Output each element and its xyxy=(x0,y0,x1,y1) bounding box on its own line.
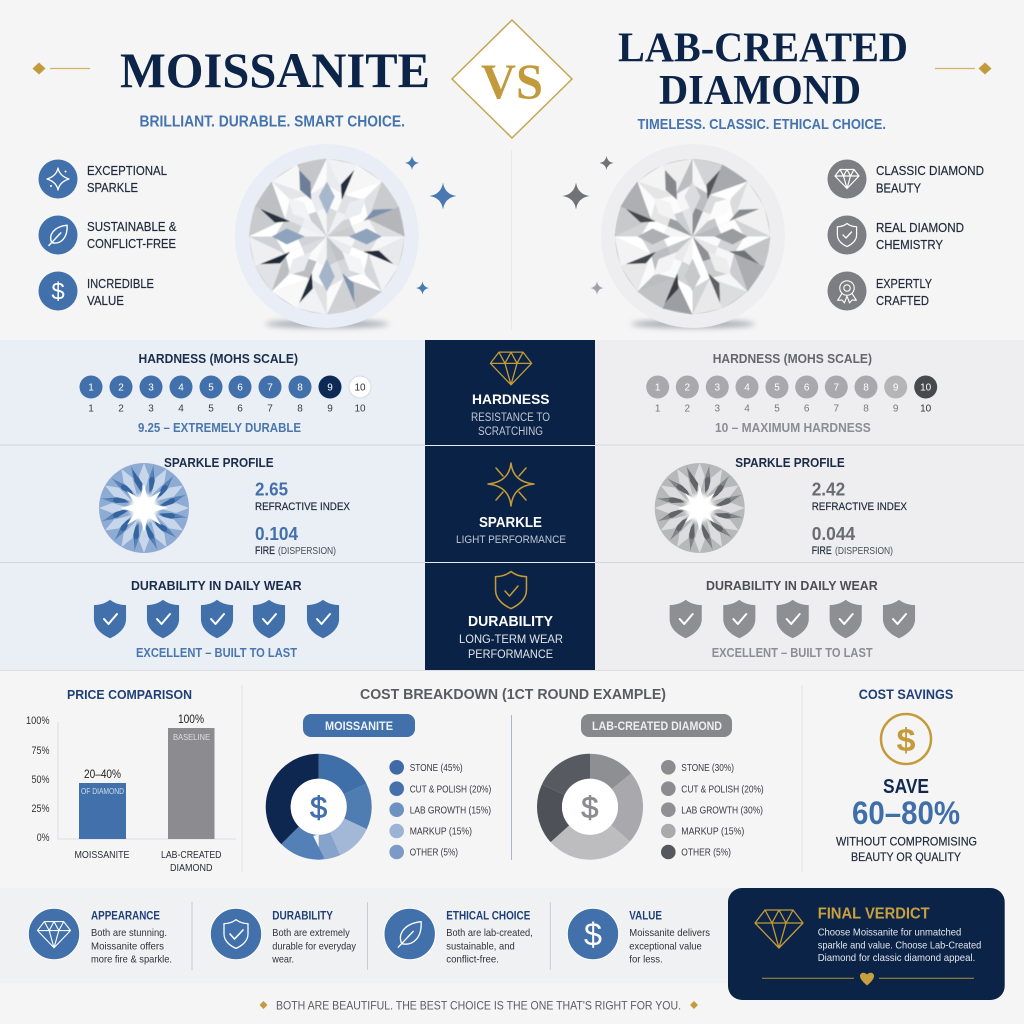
axis labels: 50% xyxy=(32,774,50,786)
chart: Mohs scale dots gray: 1 xyxy=(655,404,661,414)
header: Lab-Created Diamond title block xyxy=(618,26,992,133)
pill: lab-created diamond xyxy=(581,714,732,737)
chart: Mohs scale dots: 2 xyxy=(118,382,124,394)
chart: Mohs scale dots gray: 1 xyxy=(655,382,661,394)
chart: Mohs scale dots gray: 7 xyxy=(834,404,840,414)
chart: Mohs scale dots: 4 xyxy=(178,404,184,414)
heading: durability in daily wear gray: DURABILITY IN DAILY WEAR xyxy=(706,578,878,593)
bar labels: MOISSANITE xyxy=(74,849,130,861)
chart: Mohs scale dots: 6 xyxy=(237,404,243,414)
metric: refractive index: REFRACTIVE INDEX xyxy=(255,501,351,513)
axis labels xyxy=(26,715,50,844)
bar: lab-created diamond: BASELINE xyxy=(173,732,210,742)
chart: Mohs scale dots gray: 4 xyxy=(744,404,750,414)
chart: Mohs scale dots gray: 10 xyxy=(920,404,932,414)
text: expertly crafted: CRAFTED xyxy=(876,293,929,308)
item: durability: DURABILITY xyxy=(272,910,333,922)
item: ethical choice: conflict-free. xyxy=(446,953,499,965)
bar labels xyxy=(74,849,222,874)
metric: refractive index xyxy=(255,479,351,513)
bar: moissanite: OF DIAMOND xyxy=(81,786,124,796)
chart: Mohs scale dots: 6 xyxy=(237,382,243,394)
chart: Mohs scale dots: 8 xyxy=(297,382,303,394)
legend: lab-created diamond: MARKUP (15%) xyxy=(681,826,744,838)
legend: moissanite: MARKUP (15%) xyxy=(410,826,472,838)
stat: 60-80 percent: 60–80% xyxy=(852,795,960,831)
donut: lab-created slices xyxy=(550,766,630,847)
item: ethical choice: sustainable, and xyxy=(446,940,515,952)
metric: fire dispersion: FIRE xyxy=(255,545,275,557)
callout: excellent built to last gray: EXCELLENT – BUILT TO LAST xyxy=(712,646,873,660)
icons: blue sparkles xyxy=(405,156,456,294)
subtitle: Lab diamond tagline: TIMELESS. CLASSIC. ETHICAL CHOICE. xyxy=(638,116,886,133)
chart: Mohs scale dots: 1 xyxy=(88,382,94,394)
heading: hardness Mohs scale gray: HARDNESS (MOHS SCALE) xyxy=(713,351,872,366)
metric: fire dispersion gray: (DISPERSION) xyxy=(835,546,893,557)
heading: durability in daily wear: DURABILITY IN DAILY WEAR xyxy=(131,578,302,593)
callout: excellent built to last: EXCELLENT – BUILT TO LAST xyxy=(136,646,297,660)
legend: lab-created diamond xyxy=(661,760,764,859)
chart: Mohs scale dots: 10 xyxy=(354,404,366,414)
label: sparkle xyxy=(456,515,566,546)
text: sustainable and conflict-free xyxy=(87,219,177,251)
chart: Lab-created cost donut xyxy=(550,714,764,859)
ornament: left gold diamond and line xyxy=(32,62,90,74)
label: sparkle: LIGHT PERFORMANCE xyxy=(456,534,566,546)
icon: shield xyxy=(828,216,866,254)
text: real diamond chemistry: REAL DIAMOND xyxy=(876,220,964,235)
text: save: SAVE xyxy=(883,775,929,798)
icons: five gray shields xyxy=(670,600,915,638)
legend: moissanite: CUT & POLISH (20%) xyxy=(410,783,491,795)
text: sustainable and conflict-free: SUSTAINABLE & xyxy=(87,219,177,234)
label: hardness: RESISTANCE TO xyxy=(471,412,550,424)
panel: summary strip xyxy=(0,888,735,983)
heading: final verdict: FINAL VERDICT xyxy=(818,905,930,922)
icon: gray sparkle profile disc xyxy=(654,463,745,553)
callout: 9.25 extremely durable: 9.25 – EXTREMELY DURABLE xyxy=(138,421,301,435)
panel: Lab-created metrics xyxy=(595,340,1024,670)
pill: moissanite xyxy=(303,714,415,737)
label: durability: DURABILITY xyxy=(468,613,553,630)
legend: moissanite xyxy=(389,760,491,859)
icon: dollar xyxy=(38,272,78,310)
axis labels: 0% xyxy=(37,832,50,844)
chart: Mohs scale dots: 10 xyxy=(354,382,366,394)
chart: Mohs scale dots: 1 xyxy=(88,404,94,414)
item: ethical choice: Both are lab-created, xyxy=(446,927,533,939)
chart: Mohs scale dots: 7 xyxy=(267,382,273,394)
chart: Mohs scale dots gray xyxy=(646,376,937,414)
metric: fire dispersion: (DISPERSION) xyxy=(278,546,336,557)
pill: lab-created diamond: LAB-CREATED DIAMOND xyxy=(592,721,722,733)
chart: Mohs scale dots gray: 4 xyxy=(744,382,750,394)
icon: gray donut dollar xyxy=(562,779,618,835)
badge: VS diamond: VS xyxy=(481,53,543,109)
chart: Mohs scale dots: 3 xyxy=(148,404,154,414)
chart: Mohs scale dots gray: 6 xyxy=(804,404,810,414)
text: real diamond chemistry xyxy=(876,220,964,252)
metric: fire dispersion: 0.104 xyxy=(255,523,299,544)
item: value: exceptional value xyxy=(629,940,702,952)
label: hardness: SCRATCHING xyxy=(478,426,543,438)
item: value xyxy=(567,908,710,965)
heading: cost savings: COST SAVINGS xyxy=(859,687,953,702)
icon: ribbon award xyxy=(828,272,866,310)
chart: price comparison bars xyxy=(26,687,236,874)
text: sustainable and conflict-free: CONFLICT-FREE xyxy=(87,236,176,251)
axis labels: 100% xyxy=(26,715,50,727)
chart: Mohs scale dots gray: 2 xyxy=(685,382,691,394)
item: appearance: more fire & sparkle. xyxy=(91,953,172,965)
label: sparkle: SPARKLE xyxy=(479,515,542,531)
metric: fire dispersion gray: FIRE xyxy=(812,545,832,557)
heading: cost breakdown: COST BREAKDOWN (1CT ROUND EXAMPLE) xyxy=(360,687,666,703)
metric: refractive index gray: REFRACTIVE INDEX xyxy=(812,501,908,513)
text: real diamond chemistry: CHEMISTRY xyxy=(876,237,943,252)
legend: moissanite: STONE (45%) xyxy=(410,762,463,774)
item: durability: wear. xyxy=(271,953,294,965)
legend: lab-created diamond: CUT & POLISH (20%) xyxy=(681,783,764,795)
bar labels: LAB-CREATED xyxy=(161,849,222,861)
ornament: gold heart divider xyxy=(762,973,974,986)
item: value: $ xyxy=(584,916,602,952)
panel: cost savings xyxy=(836,687,977,864)
metric: fire dispersion gray xyxy=(812,523,893,557)
bar: moissanite: 20–40% xyxy=(84,769,121,781)
icon: gold gem xyxy=(490,352,532,385)
heading: sparkle profile: SPARKLE PROFILE xyxy=(164,455,274,470)
item: ethical choice: ETHICAL CHOICE xyxy=(446,910,531,922)
metric: refractive index gray xyxy=(812,479,908,513)
axis labels: 75% xyxy=(32,745,50,757)
item: appearance xyxy=(28,908,172,965)
chart: Mohs scale dots: 5 xyxy=(208,382,214,394)
text: verdict body xyxy=(818,927,981,964)
panel: Moissanite metrics xyxy=(0,340,425,670)
icon: gold shield xyxy=(496,571,526,609)
icons: gray sparkles xyxy=(562,156,614,294)
chart: Mohs scale dots: 4 xyxy=(178,382,184,394)
label: durability: LONG-TERM WEAR xyxy=(459,632,563,646)
bar labels: DIAMOND xyxy=(170,862,213,874)
legend: moissanite: LAB GROWTH (15%) xyxy=(410,804,491,816)
icon: donut dollar: $ xyxy=(310,790,327,825)
chart: Mohs scale dots gray: 10 xyxy=(920,382,932,394)
chart: Mohs scale dots gray: 7 xyxy=(834,382,840,394)
legend: lab-created diamond: OTHER (5%) xyxy=(681,847,731,859)
pill: moissanite: MOISSANITE xyxy=(325,721,393,733)
text: classic diamond beauty: CLASSIC DIAMOND xyxy=(876,163,984,178)
footer: closing line: BOTH ARE BEAUTIFUL. THE BEST CHOICE IS THE ONE THAT'S RIGHT FOR YOU. xyxy=(276,998,681,1012)
donut: moissanite slices xyxy=(278,766,359,847)
icon: dollar: $ xyxy=(51,278,65,306)
item: value: for less. xyxy=(629,953,663,965)
text: exceptional sparkle xyxy=(87,163,167,195)
title: Lab-Created Diamond: DIAMOND xyxy=(659,68,861,114)
item: durability: durable for everyday xyxy=(272,940,357,952)
item: value: Moissanite delivers xyxy=(629,927,710,939)
text: without compromising: BEAUTY OR QUALITY xyxy=(851,850,961,864)
label: durability xyxy=(459,613,563,661)
text: classic diamond beauty xyxy=(876,163,984,196)
icon: gold dollar coin: $ xyxy=(896,722,916,758)
chart: Moissanite cost donut xyxy=(278,714,491,859)
title: Lab-Created Diamond: LAB-CREATED xyxy=(618,26,908,72)
metric: refractive index gray: 2.42 xyxy=(812,479,845,500)
chart: Mohs scale dots: 9 xyxy=(327,382,333,394)
icon: gray donut dollar: $ xyxy=(581,790,599,825)
item: durability: Both are extremely xyxy=(272,927,350,939)
chart: Mohs scale dots: 7 xyxy=(267,404,273,414)
chart: Mohs scale dots: 3 xyxy=(148,382,154,394)
chart: Mohs scale dots gray: 3 xyxy=(715,404,721,414)
chart: Mohs scale dots: 8 xyxy=(297,404,303,414)
chart: Mohs scale dots gray: 6 xyxy=(804,382,810,394)
icon: donut dollar xyxy=(291,779,347,835)
chart: Mohs scale dots: 5 xyxy=(208,404,214,414)
legend: lab-created diamond: STONE (30%) xyxy=(681,762,734,774)
chart: Mohs scale dots gray: 5 xyxy=(774,404,780,414)
metric: fire dispersion xyxy=(255,523,336,557)
heading: price comparison: PRICE COMPARISON xyxy=(67,687,192,702)
item: appearance: APPEARANCE xyxy=(91,910,160,922)
text: expertly crafted xyxy=(876,276,932,308)
header: Moissanite title block xyxy=(32,42,430,130)
ornament: right gold diamond and line xyxy=(935,62,992,74)
label: hardness: HARDNESS xyxy=(472,391,550,407)
icon: gold dollar coin xyxy=(881,714,931,764)
text: expertly crafted: EXPERTLY xyxy=(876,276,932,291)
chart: Mohs scale dots gray: 5 xyxy=(774,382,780,394)
chart: Mohs scale dots xyxy=(80,376,371,414)
chart: Mohs scale dots gray: 9 xyxy=(893,382,899,394)
item: ethical choice xyxy=(384,908,533,965)
bar: lab-created diamond xyxy=(168,714,214,839)
icon: gem xyxy=(828,160,866,198)
item: appearance: Both are stunning. xyxy=(91,927,167,939)
text: without compromising xyxy=(836,835,977,864)
label: hardness xyxy=(471,391,550,438)
image: Moissanite round diamond with halo xyxy=(235,144,419,328)
list: Moissanite features xyxy=(38,160,177,310)
icon: gold sparkle xyxy=(488,463,534,506)
item: value: VALUE xyxy=(629,910,662,922)
panel: final verdict xyxy=(728,888,1005,1000)
chart: Mohs scale dots gray: 3 xyxy=(715,382,721,394)
text: verdict body: Diamond for classic diamond appeal. xyxy=(818,952,975,964)
heading: hardness Mohs scale: HARDNESS (MOHS SCALE) xyxy=(138,351,298,366)
label: durability: PERFORMANCE xyxy=(468,647,553,661)
text: exceptional sparkle: EXCEPTIONAL xyxy=(87,163,167,178)
legend: lab-created diamond: LAB GROWTH (30%) xyxy=(681,804,763,816)
text: verdict body: Choose Moissanite for unmatched xyxy=(818,927,961,939)
metric: refractive index: 2.65 xyxy=(255,479,288,500)
icon: leaf xyxy=(38,216,78,254)
axis labels: 25% xyxy=(32,803,50,815)
chart: Mohs scale dots gray: 9 xyxy=(893,404,899,414)
metric: fire dispersion gray: 0.044 xyxy=(812,523,856,544)
heading: sparkle profile gray: SPARKLE PROFILE xyxy=(735,455,845,470)
chart: Mohs scale dots gray: 2 xyxy=(685,404,691,414)
legend: moissanite: OTHER (5%) xyxy=(410,847,458,859)
icons: five blue shields xyxy=(94,600,339,638)
subtitle: Moissanite tagline: BRILLIANT. DURABLE. SMART CHOICE. xyxy=(140,114,405,130)
text: incredible value: INCREDIBLE xyxy=(87,276,154,291)
title: Moissanite: MOISSANITE xyxy=(120,42,430,98)
text: classic diamond beauty: BEAUTY xyxy=(876,180,921,196)
item: appearance: Moissanite offers xyxy=(91,940,164,952)
chart: Mohs scale dots gray: 8 xyxy=(863,382,869,394)
chart: Mohs scale dots: 2 xyxy=(118,404,124,414)
icon: verdict gem xyxy=(755,910,803,948)
text: exceptional sparkle: SPARKLE xyxy=(87,180,138,195)
list: Lab-created features xyxy=(828,160,984,310)
image: Lab-created round diamond with halo xyxy=(601,144,785,328)
text: verdict body: sparkle and value. Choose Lab-Created xyxy=(818,939,981,951)
bar: lab-created diamond: 100% xyxy=(178,714,204,726)
icon: sparkle xyxy=(38,160,78,198)
item: durability xyxy=(210,908,357,965)
bar: moissanite xyxy=(79,769,126,839)
chart: Mohs scale dots gray: 8 xyxy=(863,404,869,414)
badge: VS diamond xyxy=(452,20,572,138)
title: Lab-Created Diamond xyxy=(618,26,908,114)
icon: blue sparkle profile disc xyxy=(99,463,189,553)
text: without compromising: WITHOUT COMPROMISING xyxy=(836,835,977,849)
callout: 10 maximum hardness: 10 – MAXIMUM HARDNESS xyxy=(715,421,871,435)
panel: center category column xyxy=(425,340,595,670)
chart: Mohs scale dots: 9 xyxy=(327,404,333,414)
text: incredible value: VALUE xyxy=(87,293,124,308)
text: incredible value xyxy=(87,276,154,308)
